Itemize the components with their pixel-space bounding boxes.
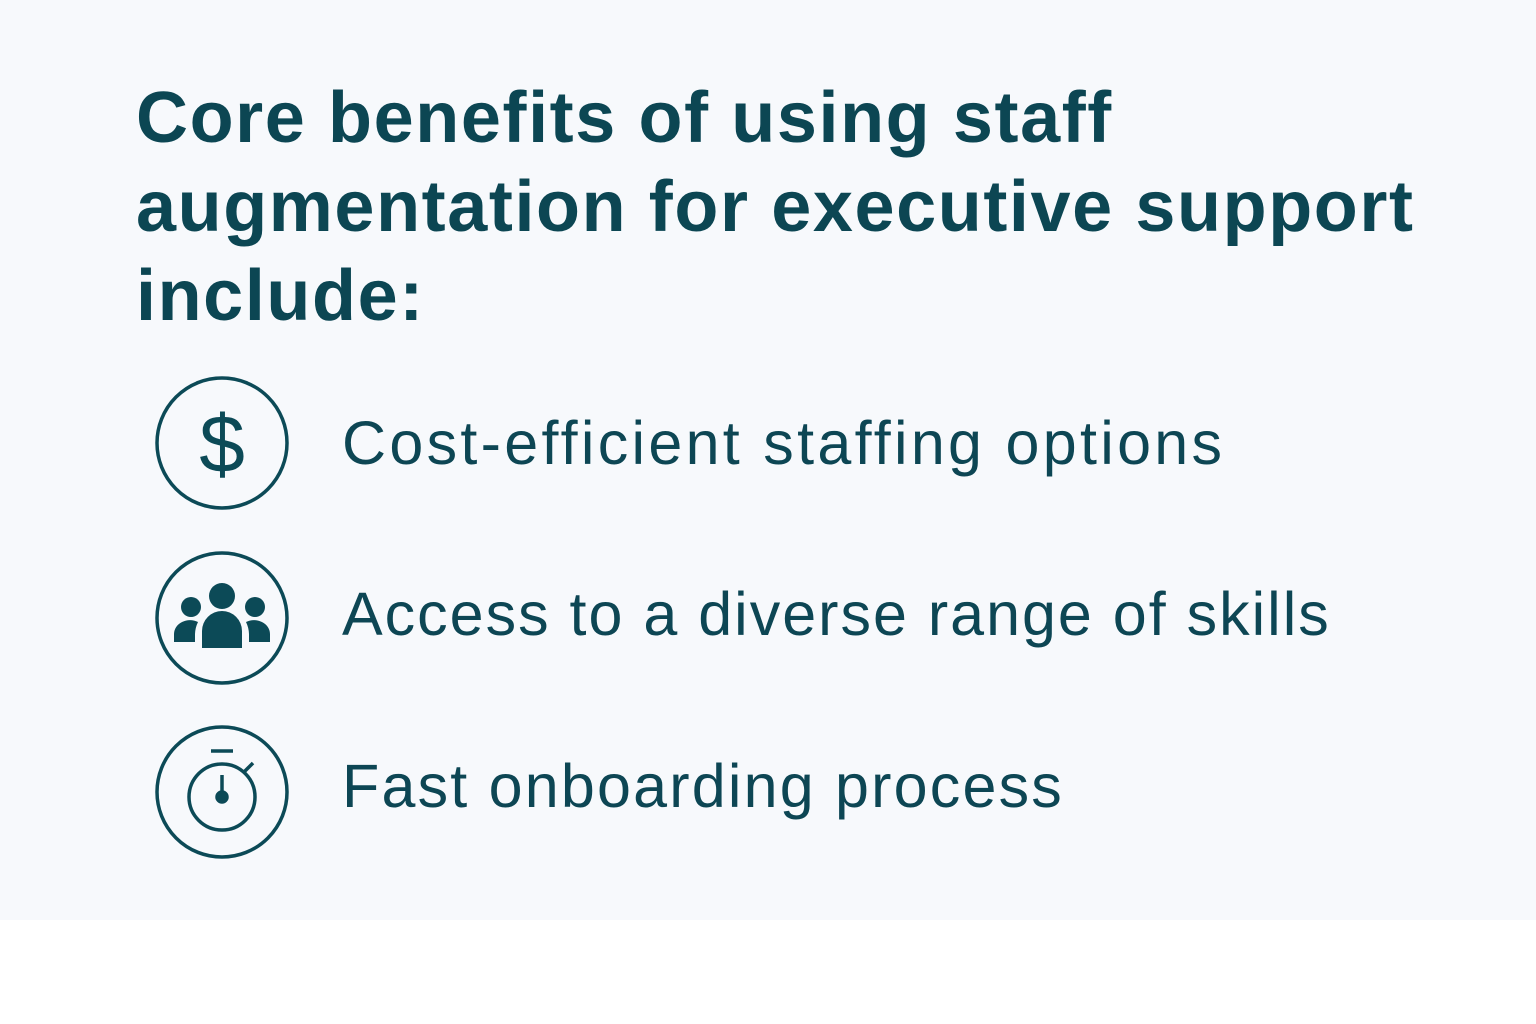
icon: dollar: $ (199, 399, 245, 490)
title (136, 78, 1415, 336)
text: item 2: Access to a diverse range of skills (342, 580, 1331, 648)
title: include: (136, 256, 425, 336)
text: item 3: Fast onboarding process (342, 752, 1064, 820)
title: Core benefits of using staff (136, 78, 1113, 158)
text: item 1: Cost-efficient staffing options (342, 409, 1225, 477)
title: augmentation for executive support (136, 167, 1415, 247)
